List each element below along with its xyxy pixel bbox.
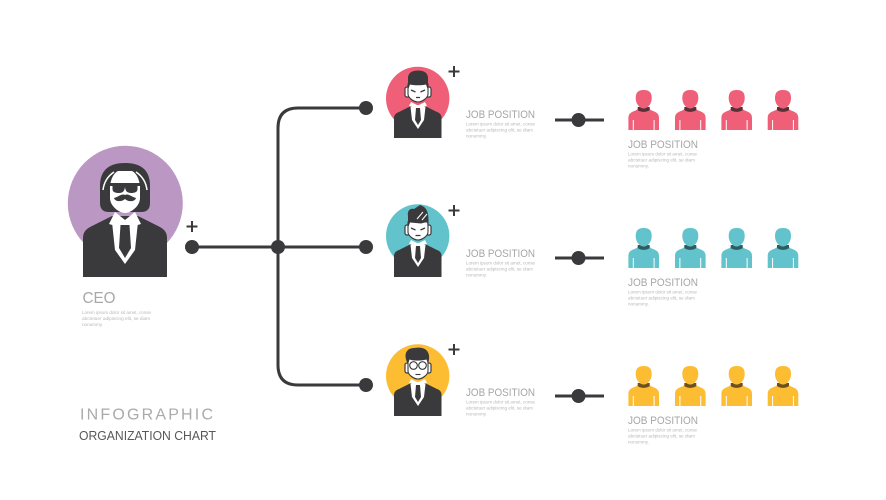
hair <box>408 205 429 228</box>
connector: yellow <box>555 389 604 403</box>
text: yellow team <box>628 415 698 444</box>
CEO text: Lorem ipsum dolor sit amet, conse <box>82 310 151 315</box>
text: red team <box>628 139 698 168</box>
ears <box>405 363 431 373</box>
manager: red portrait <box>386 67 449 138</box>
text: red team: nonummy. <box>628 164 649 168</box>
plus: red <box>448 66 460 77</box>
CEO mustache <box>114 194 136 201</box>
connector tree <box>185 101 373 392</box>
plus: CEO <box>186 221 198 232</box>
text: yellow position: Lorem ipsum dolor sit amet, conse <box>466 400 535 404</box>
text: red position <box>466 109 535 138</box>
CEO suit <box>83 216 167 277</box>
face <box>408 84 428 102</box>
text: yellow team: nonummy. <box>628 440 649 444</box>
team: yellow <box>628 366 798 406</box>
manager: yellow portrait <box>386 344 449 416</box>
title <box>79 406 216 443</box>
text: yellow team: Lorem ipsum dolor sit amet, conse <box>628 428 697 432</box>
text: red position: nonummy. <box>466 134 487 138</box>
text: teal position: JOB POSITION <box>466 248 535 260</box>
CEO text: nonummy. <box>82 322 103 327</box>
face <box>408 359 428 379</box>
text: teal team: abctetuer adipiscing elit, se diam <box>628 296 695 300</box>
text: red position: Lorem ipsum dolor sit amet, conse <box>466 122 535 126</box>
text: yellow team: JOB POSITION <box>628 415 698 427</box>
suit <box>394 383 442 416</box>
CEO face <box>110 171 140 213</box>
team: red <box>628 90 798 130</box>
text: teal position: abctetuer adipiscing elit, se diam <box>466 266 533 272</box>
text: teal team: Lorem ipsum dolor sit amet, conse <box>628 290 697 294</box>
connector: red <box>555 113 604 127</box>
hair <box>406 348 429 364</box>
text: teal team: nonummy. <box>628 302 649 306</box>
glasses <box>410 362 426 374</box>
text: yellow team: abctetuer adipiscing elit, se diam <box>628 434 695 438</box>
CEO portrait <box>68 146 183 277</box>
text: teal position: Lorem ipsum dolor sit amet, conse <box>466 260 535 266</box>
CEO text <box>82 290 151 327</box>
CEO text: abctetuer adipiscing elit, se diam <box>82 316 150 321</box>
plus: teal <box>448 205 460 216</box>
text: red team: JOB POSITION <box>628 139 698 151</box>
connector: teal <box>555 251 604 265</box>
text: red position: abctetuer adipiscing elit, se diam <box>466 128 533 132</box>
text: red team: abctetuer adipiscing elit, se diam <box>628 158 695 162</box>
text: yellow position <box>466 387 535 416</box>
manager: teal portrait <box>386 204 449 277</box>
suit <box>394 106 442 138</box>
text: yellow position: abctetuer adipiscing elit, se diam <box>466 406 533 410</box>
suit <box>394 244 442 277</box>
team: teal <box>628 228 798 268</box>
plus: yellow <box>448 344 460 355</box>
text: yellow position: nonummy. <box>466 412 487 416</box>
text: red team: Lorem ipsum dolor sit amet, conse <box>628 152 697 156</box>
ears <box>405 87 431 97</box>
text: red position: JOB POSITION <box>466 109 535 121</box>
CEO text: CEO <box>82 290 116 307</box>
title: INFOGRAPHIC <box>80 406 213 424</box>
text: teal position <box>466 248 535 278</box>
eyes <box>411 90 425 98</box>
eyes <box>411 228 425 236</box>
ears <box>405 225 431 235</box>
face <box>408 222 428 240</box>
title: ORGANIZATION CHART <box>79 428 216 443</box>
hair <box>408 70 428 90</box>
CEO hair <box>100 163 150 212</box>
text: yellow position: JOB POSITION <box>466 387 535 399</box>
text: teal position: nonummy. <box>466 272 487 278</box>
CEO sunglasses <box>110 183 140 193</box>
text: teal team: JOB POSITION <box>628 277 698 289</box>
text: teal team <box>628 277 698 306</box>
